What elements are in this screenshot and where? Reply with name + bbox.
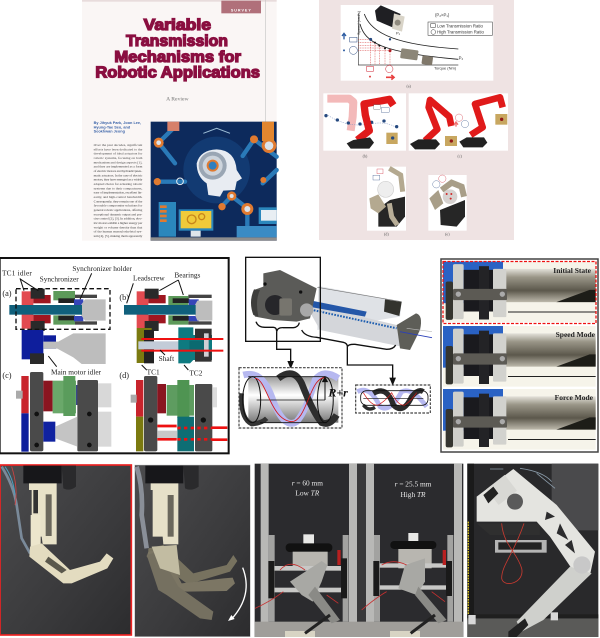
labels and leader lines: TC1 idler [2,269,32,278]
abstract text: favorable compromise solutions for [94,204,143,208]
photo (b): red robot arm with ghost [323,93,406,151]
labels and leader lines: Synchronizer holder [72,264,133,273]
abstract text: of electric motors and hydraulic/pneu- [94,169,143,173]
photo: initial state [443,262,596,324]
survey tab [221,1,261,13]
labels and leader lines: Shaft [159,354,174,363]
assembly render (c) [16,372,111,452]
test rig: low TR [255,534,349,633]
label: low TR [292,478,323,498]
abstract text: tric motors exhibit a higher energy per [94,221,143,225]
abstract text: tem [4], [5], making them apparently [94,234,143,239]
caption (d): (d) [384,232,389,237]
computer tower [159,202,176,237]
label: low TR: r = 60 mm [292,478,323,487]
motor photo [375,5,433,65]
photo: finger with motion ghosts [135,465,250,637]
labels and leader lines: (b) [119,293,129,302]
legend [428,22,492,35]
photo: force mode: Force Mode [555,393,594,402]
caption (a): (a) [406,84,412,89]
photo: speed mode: Speed Mode [556,330,596,339]
motion arrow [228,568,246,621]
abstract text: robotic systems, focusing on both [94,156,143,161]
panel: low and high transmission ratio leg tests [255,464,463,637]
abstract text: and they are implemented as a form [94,165,143,169]
braces and arrows [256,322,396,384]
abstract text: Over the past decades, significant [94,143,142,148]
photo (c): red robot arm gripping box [409,93,508,151]
panel: photos of robotic finger [0,465,250,637]
caption (b): (b) [363,153,368,158]
labels and leader lines: (c) [2,371,12,380]
chart (a): speed-torque curves [341,5,493,81]
abstract text: weight or volume density than that [94,225,142,229]
abstract text: ease of implementation, excellent lin- [94,191,143,196]
small screw detail [356,385,430,413]
abstract text: cise control [2], [3]. In addition, elec- [94,217,143,222]
transmission render [251,270,432,350]
survey tab: SURVEY [231,9,252,13]
abstract text: earity, and high-control bandwidth. [94,195,142,200]
title: Variable [144,17,211,34]
abstract text: motors, they have emerged as a widely [94,178,143,183]
photo (d): robot hand with golf ball [367,167,406,231]
legend: Low Transmission Ratio [437,23,484,28]
cross-section (b) [124,289,223,363]
photo: force mode [443,389,596,450]
label: high TR: r = 25.5 mm [395,479,432,488]
photo: initial state: Initial State [553,266,592,275]
title: Robotic Applications [95,65,260,82]
abstract text [94,143,143,239]
monitor with gears [179,209,213,237]
abstract text: of the human musculoskeletal sys- [94,230,143,234]
chart (a): speed-torque curves: (P₂>P₁) [435,13,450,18]
abstract text: matic actuators. In the case of electric [94,173,143,177]
abstract text: mechanism and design aspects [1], [94,160,142,165]
assembly render (d) [131,376,227,451]
chart (a): speed-torque curves: Torque (Nm) [434,66,457,71]
abstract text: Consequently, they remain one of the [94,199,143,204]
authors: Hyung-Tae Seo, and [94,125,131,129]
abstract text: adopted choice for actuating robotic [94,182,143,186]
chart (a): speed-torque curves: P₁ [396,31,401,36]
panel: leadscrew exploded view [239,257,432,428]
labels and leader lines: Bearings [174,270,201,279]
test rig: high TR [362,533,453,633]
authors [94,121,141,134]
caption (c): (c) [457,153,463,158]
highlight box [246,257,320,341]
labels and leader lines: Main motor idler [51,368,102,377]
robot head [197,149,242,197]
caption (e): (e) [445,232,450,237]
robotic arms [157,128,277,227]
photo: speed mode [443,326,596,387]
labels and leader lines: TC1 [147,368,160,377]
abstract text: systems due to their compactness, [94,186,142,191]
cross-section (a) [9,289,110,364]
subtitle: A Review [166,97,189,103]
large screw detail [239,368,348,428]
label: high TR: High TR [400,490,426,499]
label: high TR [395,479,432,499]
authors: By Jihyuk Park, Joon Lee, [94,121,141,125]
abstract text: development of ideal actuators for [94,152,143,156]
title: Mechanisms for [114,49,241,66]
legend: High Transmission Ratio [437,30,484,35]
illustration: robot head with robotic arms [151,122,277,241]
abstract text: general robotic applications, offering [94,208,143,213]
labels and leader lines: (a) [2,289,12,298]
labels and leader lines: Synchronizer [40,274,79,283]
chart (a): speed-torque curves: Speed (rad/s) [356,10,361,35]
labels and leader lines [2,264,203,380]
title: Transmission [126,33,228,50]
panel: synchronizer mechanism cross-sections [0,258,229,453]
panel: journal article page [82,0,277,241]
panel: robot application figure [319,0,514,240]
labels and leader lines: Leadscrew [133,274,165,283]
authors: Seokhwan Jeong [94,130,126,134]
abstract text: exceptional dynamic output and pre- [94,212,143,216]
photo (e): robot hand grasping ball [428,175,467,231]
photo: finger in initial pose [0,465,131,635]
large screw detail: R+r [327,385,348,399]
photo: legged robot with white frame [467,464,598,637]
chart (a): speed-torque curves: P₂ [459,55,464,60]
labels and leader lines: TC2 [189,369,203,378]
title [95,17,260,82]
abstract text: efforts have been dedicated to the [94,147,143,151]
label: low TR: Low TR [295,489,320,498]
panel: initial, speed and force mode photos [441,259,598,452]
labels and leader lines: (d) [119,371,129,380]
